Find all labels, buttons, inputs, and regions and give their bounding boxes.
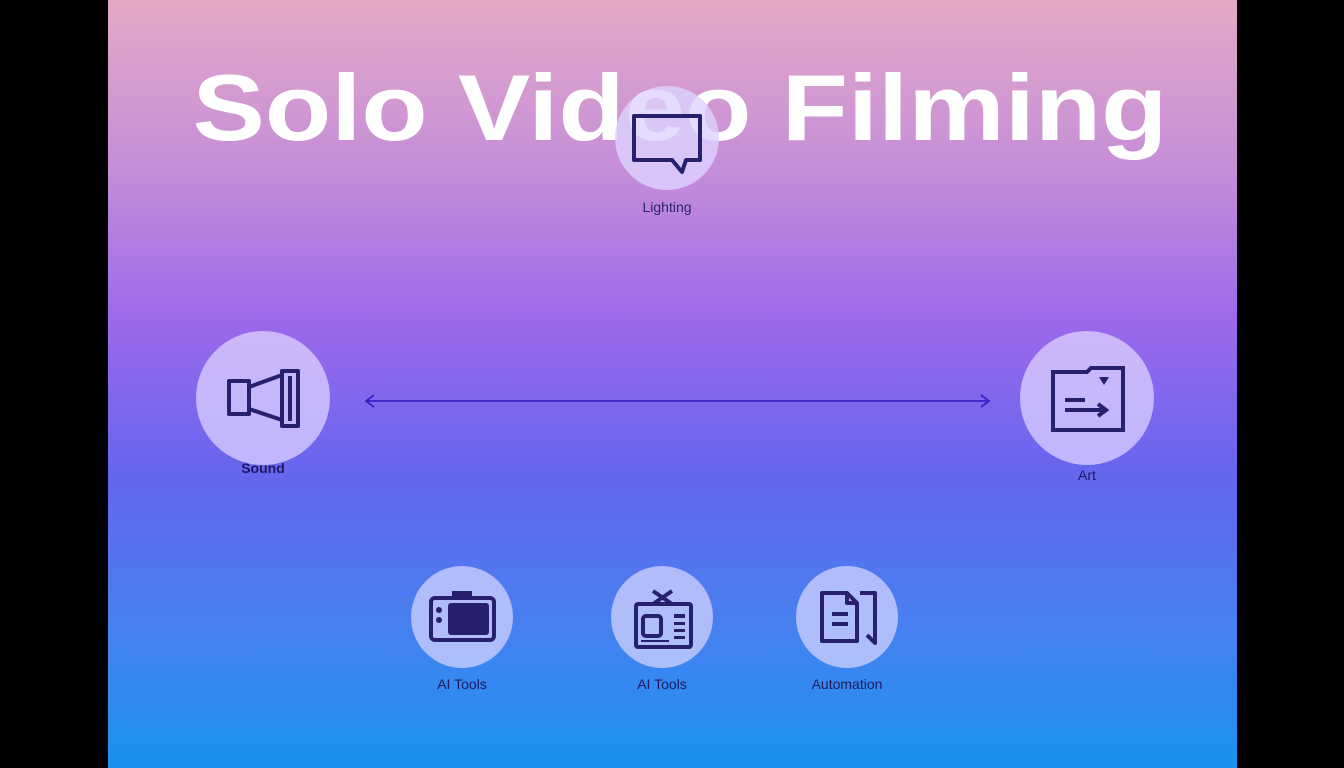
icon: AI tools (camera): AI Tools (437, 676, 487, 692)
icon: art (folder with arrow) (1020, 331, 1154, 483)
label: lighting: Lighting (642, 199, 692, 215)
icon: AI tools (camera) (411, 566, 513, 692)
icon: art (folder with arrow): Art (1078, 467, 1096, 483)
icon: sound (speaker) (196, 331, 330, 476)
icon: automation (document) (796, 566, 898, 692)
icon: AI tools (tv): AI Tools (637, 676, 687, 692)
icon: lighting (speech bubble) (615, 86, 719, 190)
icon: sound (speaker): Sound (241, 460, 285, 476)
title: Solo Video Filming (192, 55, 1168, 160)
icon: automation (document): Automation (812, 676, 882, 692)
arrow: double-headed connector (366, 395, 989, 407)
icon: AI tools (tv) (611, 566, 713, 692)
